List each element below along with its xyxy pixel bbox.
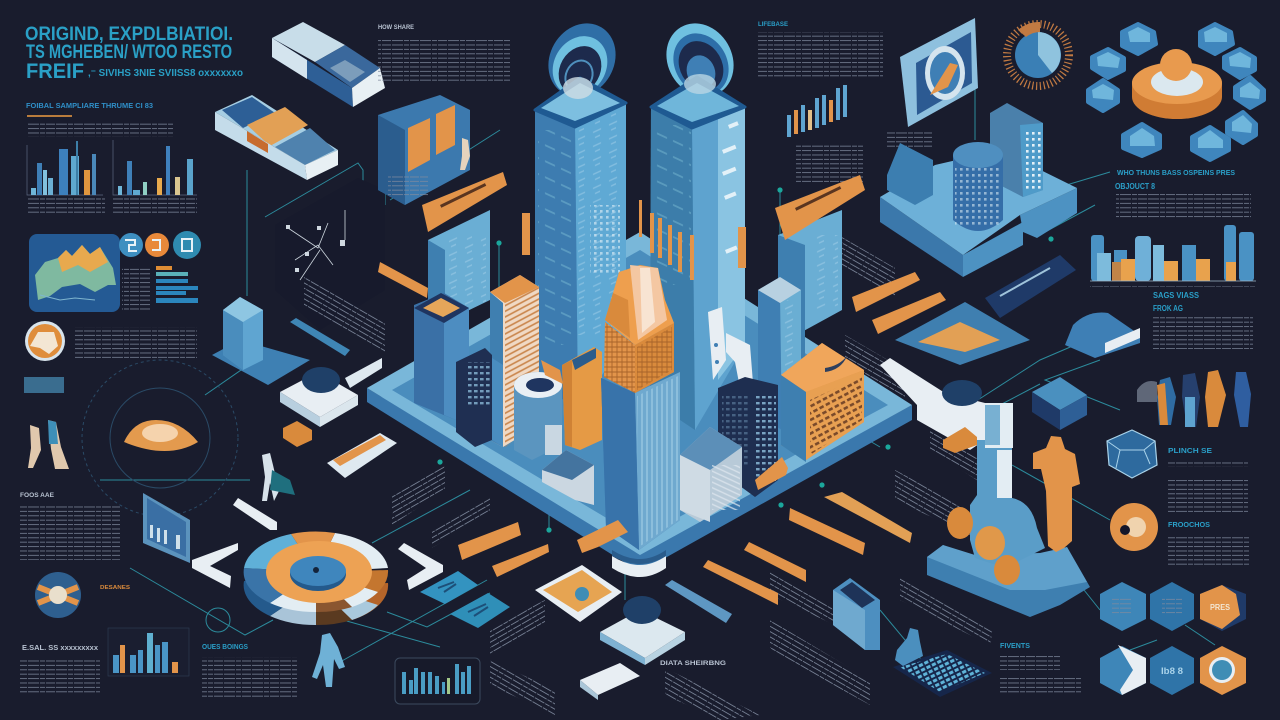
text block: right lower xyxy=(1153,317,1253,349)
people group xyxy=(1137,370,1251,427)
front cylinder building xyxy=(953,142,1003,231)
building: low white block xyxy=(542,450,594,505)
heading: right lower xyxy=(1153,291,1200,313)
building: navy cap tower xyxy=(414,293,469,420)
heading: right lower note xyxy=(1168,522,1250,568)
building: giant tower left xyxy=(535,11,629,410)
figures xyxy=(28,420,69,469)
iso cards xyxy=(895,255,1076,365)
vehicle device xyxy=(1065,312,1140,358)
figure: person lower xyxy=(312,633,345,687)
building: white sculpture xyxy=(708,307,753,388)
radar panel xyxy=(24,360,238,516)
panel: map xyxy=(29,231,201,312)
building: gray office xyxy=(680,427,742,522)
hexagon grid xyxy=(1100,582,1246,695)
white block xyxy=(580,663,640,700)
orange dome xyxy=(124,420,198,451)
heading: right panel xyxy=(1115,168,1235,191)
title xyxy=(25,24,243,83)
dial icon xyxy=(1007,22,1069,86)
text block: left lower xyxy=(20,492,120,560)
small iso bar chart xyxy=(787,85,847,137)
white block: left platform junction xyxy=(280,358,382,427)
orange statue xyxy=(1033,436,1080,552)
ladder block xyxy=(1032,377,1087,430)
panel: left charts xyxy=(26,101,197,216)
building: striped beige xyxy=(490,275,539,447)
polyhedron xyxy=(1107,430,1157,478)
ring chart xyxy=(244,532,388,625)
hub cluster xyxy=(1088,24,1264,160)
iso text blocks xyxy=(304,130,1000,720)
bar chart: right xyxy=(113,140,197,195)
building: main tower base xyxy=(601,372,680,550)
orange antenna frame xyxy=(522,200,746,280)
bar chart: left xyxy=(27,141,103,195)
map icons xyxy=(119,231,201,259)
machine: lower right xyxy=(927,403,1090,617)
building: pale tower right xyxy=(758,277,801,430)
title: ORIGIND, EXPDLBIATIOI. xyxy=(25,24,233,45)
text block: hand note xyxy=(75,327,197,358)
text block: left lower: FOOS AAE xyxy=(20,492,55,499)
text block: chart intro xyxy=(27,115,173,137)
terrain xyxy=(35,245,116,300)
figure: standing person xyxy=(262,453,279,501)
text block: right panel xyxy=(1116,194,1251,220)
platform xyxy=(367,232,912,577)
panel: network screen xyxy=(275,178,385,330)
orange ring xyxy=(1110,503,1158,551)
emblem xyxy=(35,572,130,618)
text block: top center left: HOW SHARE xyxy=(378,24,415,31)
text block: chart captions xyxy=(27,197,197,216)
orange label: center right xyxy=(755,457,788,490)
text block: top center left xyxy=(378,24,510,84)
heading: lower center-left: OUES BOINGS xyxy=(202,644,248,651)
connector lines xyxy=(100,88,1215,670)
L brackets xyxy=(192,498,443,590)
orange bars right xyxy=(852,272,946,334)
orange cube xyxy=(283,421,312,447)
device: top scanner xyxy=(272,22,385,107)
orange bars lower right xyxy=(665,492,912,623)
orange bar label xyxy=(422,172,507,232)
building: dark windows xyxy=(456,348,503,447)
temple icon xyxy=(24,377,64,393)
device: orange module xyxy=(215,95,338,180)
connector nodes xyxy=(437,187,1054,533)
title: ,⁻ SIVIHS 3NIE SVIISS8 oxxxxxxo xyxy=(88,68,243,79)
building: giant tower right xyxy=(650,11,747,430)
block: orange and blue archive xyxy=(378,95,470,205)
framed square icon xyxy=(900,18,978,127)
platform front bump xyxy=(612,556,666,577)
heading: data: DIATA SHEIRBNG xyxy=(660,660,726,667)
building: round tower xyxy=(514,360,563,460)
emblem: DESANES xyxy=(100,585,130,591)
hexagon grid: PRES xyxy=(1210,603,1231,612)
server complex xyxy=(880,103,1077,277)
building: navy windows xyxy=(718,377,778,497)
building: orange apartment xyxy=(781,343,864,462)
text block: map notes xyxy=(122,266,150,311)
map cards xyxy=(420,565,622,628)
heading: right panel: OBJOUCT 8 xyxy=(1115,182,1155,191)
orange bar label xyxy=(775,175,865,240)
text block: lower left xyxy=(20,660,100,695)
callout: hand icon xyxy=(25,321,197,361)
building: right mid tower xyxy=(775,175,865,360)
heading: right lower: FROK AG xyxy=(1153,304,1183,313)
chart: lower center xyxy=(395,658,480,704)
rings xyxy=(653,11,747,109)
screen chart xyxy=(143,493,190,563)
heading: polyhedron note xyxy=(1168,448,1248,515)
heading: right lower: SAGS VIASS xyxy=(1153,291,1200,300)
heading: lower center-left xyxy=(202,644,297,697)
bar chart: right xyxy=(1090,225,1256,287)
legend bars xyxy=(156,266,198,303)
orange card xyxy=(327,433,397,478)
teal shape xyxy=(270,470,295,495)
text block: top center right xyxy=(758,21,883,77)
box device xyxy=(833,578,880,650)
text block: top center right: LIFEBASE xyxy=(758,21,789,28)
heading: right lower note: FROOCHOS xyxy=(1168,522,1210,529)
polyhedra xyxy=(1088,24,1264,160)
small tower on base xyxy=(212,297,350,385)
heading: right panel: WHO THUNS BASS OSPEINS PRES xyxy=(1117,168,1235,177)
orange bars lower center xyxy=(458,522,549,577)
chart: lower left xyxy=(108,628,189,676)
building: main tower orange crown xyxy=(604,265,674,393)
hexagon grid: Ib8 8 xyxy=(1161,666,1183,676)
title: TS MGHEBEN/ WTOO RESTO xyxy=(26,42,232,63)
orange label: center front xyxy=(577,520,628,553)
orange tag left xyxy=(378,262,428,298)
heading: polyhedron note: PLINCH SE xyxy=(1168,448,1212,455)
white road and junction right xyxy=(880,358,985,453)
heading: lower left: E.SAL. SS xxxxxxxxx xyxy=(22,645,98,652)
building: orange slab xyxy=(562,347,602,450)
figure xyxy=(460,138,470,170)
rings xyxy=(535,11,629,109)
title: FREIF xyxy=(26,60,84,83)
heading: events: FIVENTS xyxy=(1000,643,1030,650)
heading: events xyxy=(1000,643,1082,693)
keyboard xyxy=(893,650,992,697)
building: left mid tower xyxy=(422,172,507,340)
rear building xyxy=(990,103,1043,197)
figure: statue small xyxy=(895,628,923,666)
cloud box xyxy=(600,596,685,665)
heading: charts: FOIBAL SAMPLIARE THRUME CI 83 xyxy=(26,101,153,110)
